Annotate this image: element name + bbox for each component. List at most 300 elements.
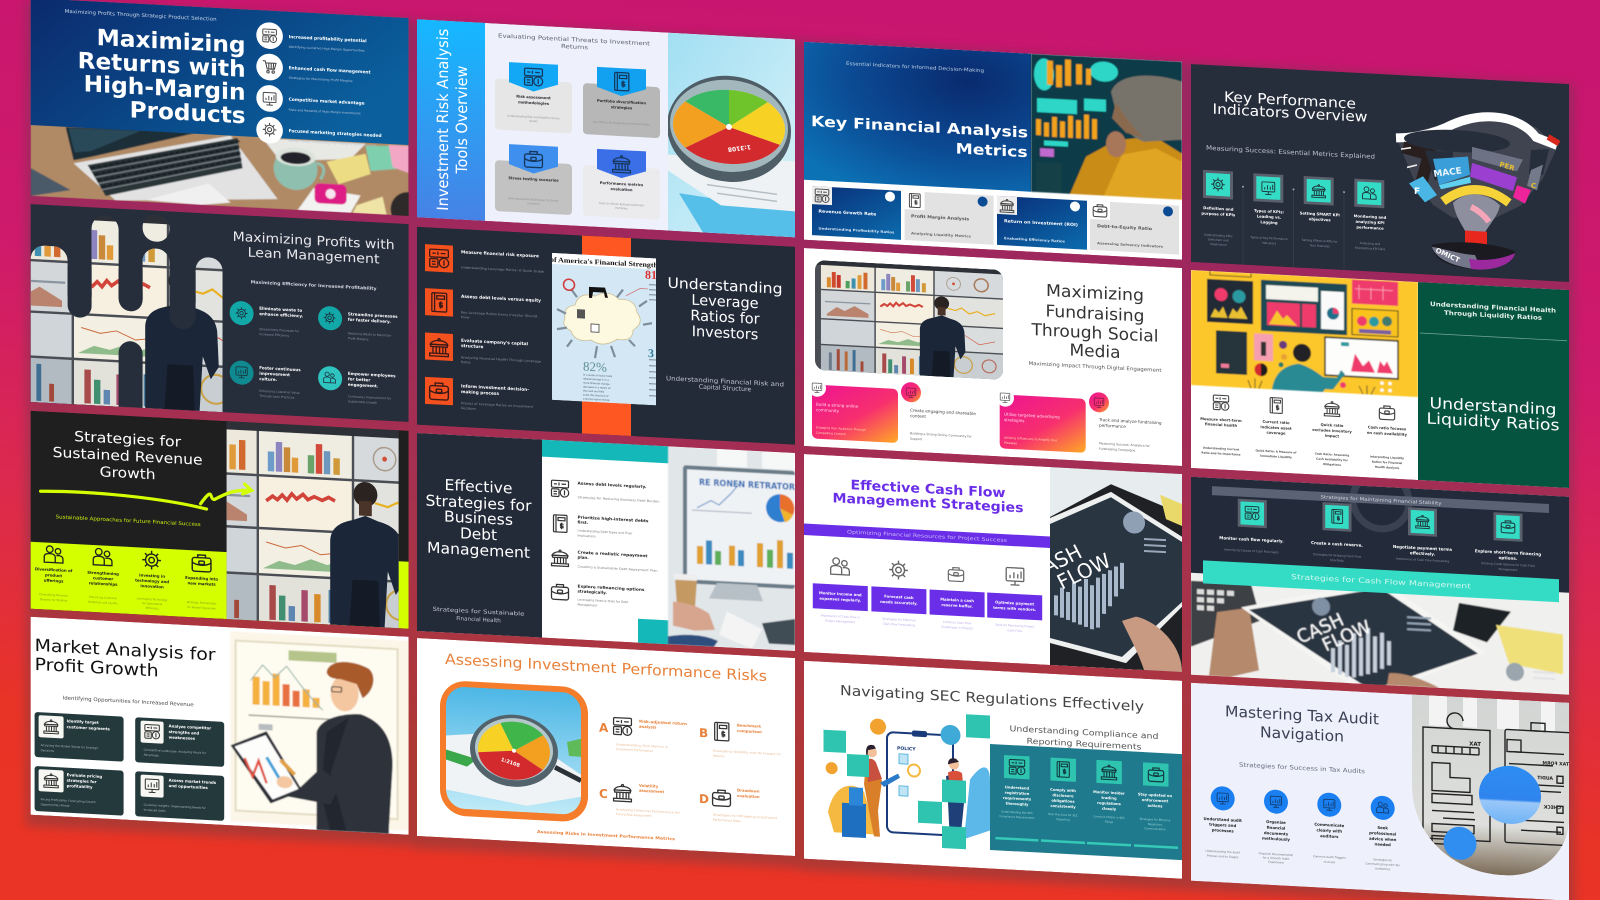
pink circle items: Support — [910, 437, 923, 441]
four liquidity columns: Current ratio — [1263, 420, 1290, 425]
infographic picture: scale the structure of — [583, 393, 609, 398]
title: Market Analysis for — [35, 636, 216, 666]
chart: performance trophy graphic: F — [1414, 187, 1420, 197]
teal requirements panel: actions — [1147, 804, 1163, 809]
subtitle: Identifying Opportunities for Increased Revenue — [63, 695, 194, 708]
four KPI steps: Leading vs. — [1257, 213, 1282, 220]
illustration: businessman reading chart — [231, 631, 409, 835]
four lettered items: Volatility — [639, 783, 659, 789]
four KPI steps: Analyzing and — [1360, 241, 1380, 246]
four list items: Understanding Debt Types and Their — [578, 529, 633, 535]
subtitle: Strategies for Sustainable — [432, 607, 525, 618]
photo: tablet showing cash flow: CASH — [1026, 539, 1086, 585]
four step columns: Maintain a cash — [940, 597, 974, 603]
photo: hands on cash flow tablet: CASH — [1293, 609, 1347, 648]
title: Growth — [100, 464, 156, 483]
four metric cards: Understanding Profitability Ratios — [818, 226, 894, 234]
four liquidity columns: Immediate Liquidity — [1260, 454, 1292, 459]
four dark cards: Assess market trends — [169, 778, 217, 785]
title: Through Social — [1030, 320, 1158, 346]
teal requirements panel: Regulatory — [1148, 822, 1163, 827]
purple band with subtitle: Optimizing Financial Resources for Project Success — [847, 529, 1007, 544]
four liquidity columns: Interpreting Liquidity — [1370, 454, 1404, 460]
title: Fundraising — [1045, 301, 1144, 326]
four blue circle steps: advice when — [1369, 836, 1397, 842]
four teal items: Empower employees — [348, 371, 396, 378]
four blue circle steps: Organize — [1266, 819, 1286, 825]
four KPI steps: Indicators — [1262, 241, 1277, 246]
panel: slide Understanding Leverage Ratios for Investors — [417, 227, 795, 445]
four blue circle steps: Financial Documentation — [1259, 851, 1294, 857]
pink circle items — [901, 382, 1162, 454]
gradient cards: Utilizing Influencers to Amplify Your — [1004, 436, 1058, 442]
four lettered items: assessment — [639, 788, 664, 794]
four dark cards: Customer Insights: Understanding Needs for — [144, 803, 207, 810]
teal requirements panel: Stay updated on — [1138, 792, 1172, 798]
list text: Analyzing Financial Health Through Leverage — [461, 355, 541, 364]
four lime columns: technology and — [135, 578, 169, 584]
four blue circle steps: Strategies for — [1373, 857, 1393, 862]
list text: Decisions — [461, 406, 476, 411]
panel: slide Assessing Investment Performance Risks — [417, 638, 795, 856]
dark title panel — [417, 433, 542, 638]
four strategy columns: Shortfalls — [1330, 558, 1344, 563]
four list items: Explore refinancing options — [578, 584, 645, 592]
four lime columns: Diversification of — [35, 566, 73, 573]
four liquidity columns: Cash Availability for — [1316, 457, 1348, 462]
four step columns: Monitor income and — [819, 590, 862, 597]
framed gauge photo: 1:2108 — [500, 757, 521, 769]
four step columns: Cash Flow — [1007, 628, 1023, 633]
infographic picture — [550, 253, 658, 405]
teal accents — [542, 440, 669, 463]
panel: slide Navigating SEC Regulations Effectively — [804, 661, 1182, 879]
teal requirements panel — [990, 744, 1182, 860]
list of four benefits with round icons: Market Trends Influencing High-Margin Product Success — [289, 139, 377, 147]
panel: slide Effective Cash Flow Management Strategies — [804, 454, 1182, 672]
four lettered items: Analyzing Historical Performance for — [616, 807, 681, 815]
teal requirements panel: Communication — [1144, 826, 1166, 831]
photo: tablet showing cash flow: FLOW — [1053, 548, 1115, 594]
four step columns: terms with vendors. — [993, 605, 1037, 612]
photo: man facing dashboard wall — [226, 421, 399, 628]
four strategy columns: Importance of Cash Flow Forecasting — [1396, 557, 1449, 563]
four strategy columns — [1219, 497, 1541, 573]
panel: slide Effective Strategies for Business Debt Management — [417, 433, 796, 651]
title: Business — [444, 507, 513, 529]
blue title band — [31, 0, 409, 145]
four KPI steps: Setting Effective KPIs for — [1302, 238, 1338, 244]
four liquidity columns: Understanding Current — [1203, 446, 1240, 452]
photo: laptop on a desk — [31, 0, 427, 229]
four dark cards: strategies for — [67, 778, 97, 784]
teal requirements panel: trading — [1101, 796, 1117, 801]
blue title band — [804, 42, 1031, 192]
four teal items: Eliminate waste to — [259, 306, 302, 313]
four dark cards: Increased Sales — [144, 808, 166, 813]
list text: Measure financial risk exposure — [461, 249, 539, 259]
four strategy columns: Identifying Causes of Cash Flow Gaps — [1224, 547, 1279, 554]
illustration: compliance policy phone: POLICY — [897, 746, 916, 753]
teal requirements panel: Monitor insider — [1093, 790, 1125, 796]
title: Returns with — [78, 48, 246, 83]
heading: Understanding Financial Health — [1430, 301, 1556, 315]
four liquidity columns: excludes inventory — [1312, 428, 1352, 434]
four strategy columns: Strategies for Bridging Cash Flow — [1313, 552, 1362, 559]
four lettered items: comparison — [737, 728, 762, 734]
list of four benefits with round icons: Identifying Lucrative High-Margin Opportunities — [289, 45, 365, 53]
panel: slide Strategies for Sustained Revenue Growth — [30, 410, 408, 629]
teal requirements panel: Best Practices for SEC — [1048, 812, 1078, 818]
four metric cards: Return on Investment (ROI) — [1004, 218, 1078, 227]
mask fingers — [68, 266, 196, 408]
footer: Assessing Risks in Investment Performance Metrics — [537, 829, 676, 841]
four lettered items: Returns — [713, 754, 725, 758]
four KPI steps: Understanding KPIs: — [1204, 233, 1233, 238]
title: Navigating SEC Regulations Effectively — [840, 683, 1144, 715]
title: Management Strategies — [833, 491, 1024, 516]
four lettered items: B — [699, 726, 708, 740]
list text: Key Leverage Ratios Every Investor Should — [461, 310, 537, 318]
four list items: Leveraging Finance Tools for Debt — [578, 598, 629, 604]
teal requirements panel: obligations — [1051, 799, 1075, 804]
four teal items: engagement. — [348, 382, 379, 388]
four metric cards: Revenue Growth Rate — [818, 208, 877, 217]
four cards with blue tabs: strategies — [611, 105, 633, 110]
four KPI steps: Monitoring and — [1354, 213, 1387, 220]
teal requirements panel: Understanding Key SEC — [1001, 809, 1033, 815]
photo: tax forms in oval mask: AUDIT — [1536, 775, 1553, 782]
four lime columns: innovation — [140, 583, 164, 589]
four strategy columns: options. — [1499, 555, 1518, 561]
four blue circle steps: Authorities — [1375, 866, 1391, 871]
four KPI steps: Types of KPIs: — [1254, 208, 1284, 215]
teal requirements panel: regulations — [1097, 801, 1122, 806]
four dark cards: Identify target — [67, 718, 99, 725]
teal requirements panel: disclosure — [1052, 793, 1074, 798]
four step columns: Challenges in Projects — [941, 625, 973, 630]
four strategy columns: Management — [1498, 567, 1518, 572]
four cards with blue tabs: Performance metrics — [600, 181, 644, 187]
subtitle: Maximizing Profits Through Strategic Product Selection — [65, 9, 217, 23]
photo: hands on cash flow tablet — [1191, 571, 1569, 709]
four blue circle steps — [1204, 785, 1400, 872]
framed gauge photo — [440, 680, 588, 823]
teal requirements panel: Reporting — [1056, 817, 1070, 822]
infographic picture: 82% — [583, 359, 607, 375]
chart: performance trophy graphic — [1396, 112, 1559, 274]
four lime columns: Strengthening — [87, 570, 119, 576]
panel: slide Investment Risk Analysis Tools Overview — [417, 19, 804, 238]
four lime columns: Streams for Stability — [40, 597, 68, 603]
four cards with blue tabs: Risk Assessment Techniques for Smart — [508, 196, 559, 203]
four lime columns: Leveraging Technology — [137, 596, 168, 602]
panel: slide Key Performance Indicators Overview — [1191, 64, 1569, 282]
four blue circle steps: Communicate — [1314, 822, 1345, 828]
four blue circle steps: meticulously — [1262, 835, 1290, 842]
four teal items: Sustainable Growth — [348, 399, 377, 405]
green title panel — [1418, 282, 1569, 488]
orange vertical strip — [582, 235, 631, 436]
four KPI steps: Types of Key Performance — [1249, 235, 1288, 241]
four teal items: culture. — [259, 376, 278, 382]
four strategy columns: Negotiate payment terms — [1393, 544, 1453, 552]
four cards with blue tabs: Risk assessment — [516, 95, 551, 100]
pink circle items: Track and analyze fundraising — [1098, 417, 1162, 425]
four strategy columns: Explore short-term financing — [1475, 548, 1541, 557]
four dark cards: profitability — [67, 783, 93, 790]
four blue circle steps: Experience — [1268, 860, 1284, 865]
title: Assessing Investment Performance Risks — [445, 652, 767, 685]
four teal items — [230, 301, 398, 406]
title: Investors — [692, 324, 758, 343]
photo: man facing dashboard wall in finger-shaped mask — [30, 216, 223, 412]
four liquidity columns — [1200, 394, 1408, 470]
four step columns — [813, 556, 1042, 634]
photo: hands on cash flow tablet: FLOW — [1319, 617, 1375, 656]
four list items: Prioritize high-interest debts — [578, 515, 649, 523]
top band with subtitle — [1212, 486, 1549, 513]
title: Liquidity Ratios — [1427, 409, 1560, 435]
four lettered items: Investment Performance — [616, 747, 653, 753]
pink circle items: Fundraising Campaigns — [1099, 447, 1136, 453]
four lime columns: for Market Expansion — [187, 605, 216, 611]
four lettered items: Drawdown — [737, 787, 760, 794]
photo: tablet showing cash flow — [1026, 466, 1182, 672]
four cards with blue tabs: Portfolio diversification — [597, 99, 646, 105]
four list items: Strategies for Reducing Business Debt Burden — [578, 495, 660, 504]
subtitle: Maximizing Impact Through Digital Engagement — [1028, 361, 1162, 374]
infographic picture: the cash and files — [583, 389, 605, 394]
four dark cards: Evaluate pricing — [67, 772, 102, 779]
four blue circle steps: to Avoid — [1324, 860, 1335, 864]
list text — [461, 249, 544, 414]
four step columns: Cash Flow Forecasting — [883, 622, 915, 627]
list text: Inform investment decision- — [461, 383, 529, 393]
four dark cards: Advantage — [144, 753, 159, 758]
teal requirements panel: enforcement — [1142, 798, 1168, 803]
teal requirements panel: consistently — [1050, 804, 1076, 809]
four KPI steps: Definition and — [1203, 205, 1234, 212]
list of four benefits with round icons: Enhanced cash flow management — [289, 65, 371, 76]
four lime columns: Enhancing Customer — [89, 595, 118, 600]
infographic picture: of America's Financial Strength — [550, 256, 658, 269]
four cards with blue tabs: Investors — [528, 201, 540, 206]
four blue circle steps: professional — [1369, 830, 1396, 837]
four lime columns: relationships — [89, 580, 118, 587]
rotated title — [436, 30, 468, 210]
photo: tax forms in oval mask: TAX FORM — [1542, 760, 1569, 768]
four lettered items: Future Risk Assessment — [616, 812, 652, 818]
four step columns: expenses regularly. — [819, 596, 862, 603]
title: Metrics — [956, 141, 1028, 161]
title: Management — [427, 539, 530, 562]
four list items: Create a realistic repayment — [578, 550, 648, 558]
list of four benefits with round icons: Increased profitability potential — [289, 34, 367, 44]
divider — [1420, 333, 1567, 341]
four lime columns: customer — [93, 575, 113, 581]
title: Effective Cash Flow — [851, 478, 1006, 501]
subtitle: Measuring Success: Essential Metrics Explained — [1206, 145, 1375, 161]
title: Mastering Tax Audit — [1225, 702, 1379, 728]
four lettered items: Benchmark — [737, 722, 761, 729]
four blue circle steps: Understanding the Audit — [1206, 849, 1241, 855]
photo: tax forms in oval mask — [1412, 694, 1571, 879]
teal requirements panel: closely — [1102, 807, 1117, 811]
teal requirements panel: Common Pitfalls in SEC — [1093, 814, 1125, 820]
four liquidity columns: on cash availability — [1367, 431, 1408, 437]
four dark cards: and opportunities — [169, 783, 209, 790]
four lime columns: Investing in — [139, 572, 165, 579]
top band with subtitle: Strategies for Maintaining Financial Stability — [1320, 494, 1442, 507]
four liquidity columns: Quick ratio — [1321, 423, 1344, 428]
four step columns: Importance of Cash Flow in — [821, 613, 860, 619]
teal requirements panel: Strategies for Effective — [1140, 817, 1171, 822]
four teal items: Streamline processes — [348, 311, 398, 319]
four list items: Creating a Sustainable Debt Repayment Plan — [578, 565, 658, 573]
four blue circle steps: Seek — [1377, 825, 1388, 830]
photo: tax forms in oval mask: CHECK — [1543, 804, 1561, 811]
lime lower band — [31, 542, 409, 629]
four list items: strategically. — [578, 589, 607, 595]
four cards with blue tabs: Assets — [529, 119, 538, 123]
four cards with blue tabs: evaluation — [611, 187, 633, 192]
title: Strategies for — [74, 429, 181, 451]
title: Sustained Revenue — [53, 445, 203, 469]
four metric cards: Debt-to-Equity Ratio — [1097, 223, 1152, 231]
four lime columns: Efficiency — [146, 606, 159, 611]
panel: slide Maximizing Profits with Lean Management — [30, 204, 408, 422]
four step columns: Forecast cash — [884, 594, 914, 600]
four blue circle steps: financial — [1267, 825, 1285, 831]
four dark cards: Competitive Landscape: Analyzing Rivals for — [144, 748, 207, 755]
list text: Assess debt levels versus equity — [461, 294, 541, 304]
four dark cards: Opportunities Ahead — [41, 802, 70, 808]
subtitle: Sustainable Approaches for Future Financial Success — [56, 514, 201, 528]
four KPI steps: Interpreting KPI Data — [1355, 246, 1385, 251]
four teal items: Enhancing Customer Value — [259, 389, 300, 395]
blue side strip — [417, 19, 485, 221]
four liquidity columns: Measure short-term — [1200, 417, 1242, 423]
four liquidity columns: Health Analysis — [1375, 465, 1400, 470]
four lime columns: Strategic Partnerships — [187, 600, 217, 606]
four KPI steps — [1201, 170, 1387, 272]
four liquidity columns: financial health — [1205, 422, 1237, 428]
title: Maximizing — [97, 25, 246, 59]
four lettered items: Strategies for Mitigating Investment — [713, 813, 778, 820]
title: Key Performance — [1224, 90, 1356, 113]
four KPI steps: Lagging — [1260, 219, 1278, 225]
heading: Returns — [561, 44, 588, 51]
four liquidity columns: coverage — [1266, 431, 1286, 436]
four lettered items: Performance Risks — [713, 818, 741, 823]
four teal items: Increased Efficiency — [259, 332, 289, 338]
four cards with blue tabs: methodologies — [518, 100, 550, 106]
four KPI steps: performance — [1356, 224, 1384, 231]
photo: man facing dashboard wall — [815, 260, 1003, 380]
four liquidity columns: impact — [1325, 434, 1339, 439]
rotated title: Tools Overview — [453, 65, 471, 175]
four liquidity columns: Cash Ratio: Assessing — [1315, 452, 1349, 457]
panel: slide Understanding Liquidity Ratios — [1191, 264, 1569, 488]
four step columns: Project Management — [825, 619, 856, 624]
infographic picture: more financial change — [583, 381, 610, 386]
gradient cards: Utilize targeted advertising — [1004, 412, 1060, 420]
four metric cards: Assessing Solvency Indicators — [1097, 241, 1163, 249]
four blue circle steps: auditors — [1320, 833, 1339, 839]
infographic picture: 81 — [645, 267, 657, 282]
pink circle items: Create engaging and shareable — [910, 408, 976, 416]
title: Maximizing Profits with — [233, 230, 395, 253]
infographic picture: 3 — [648, 346, 654, 360]
panel: slide Market Analysis for Profit Growth — [31, 617, 409, 835]
list text: Evaluate company's capital — [461, 338, 529, 347]
photo: man looking at glowing charts — [1031, 54, 1182, 200]
four strategy columns: Monitor cash flow regularly. — [1219, 535, 1284, 544]
four KPI steps: Importance — [1210, 242, 1227, 247]
four blue circle steps: Process and Its Stages — [1207, 854, 1239, 859]
list of four benefits with round icons: Focused marketing strategies needed — [289, 128, 382, 139]
four step columns: Common Cash Flow — [943, 620, 972, 625]
four teal items: Foster continuous — [259, 365, 301, 372]
list text: Ratios — [461, 360, 471, 365]
teal requirements panel: Comply with — [1050, 788, 1076, 793]
four teal items: Profit Margins — [348, 336, 369, 341]
four dark cards: customer segments — [67, 724, 111, 731]
four KPI steps: Your Business — [1310, 243, 1330, 248]
list of four benefits with round icons: Risks and Rewards of High-Margin Investments — [289, 108, 361, 116]
four blue circle steps: Understand audit — [1204, 816, 1242, 823]
subtitle: Essential Indicators for Informed Decision-Making — [846, 61, 984, 74]
four step columns: reserve buffer. — [941, 602, 973, 609]
title: Indicators Overview — [1213, 102, 1367, 126]
dark top panel — [1191, 477, 1569, 593]
chart: performance trophy graphic: PER — [1499, 161, 1516, 173]
list of four benefits with round icons — [256, 22, 382, 149]
four teal items: Through Lean Practices — [258, 394, 295, 400]
four KPI steps: purpose of KPIs — [1201, 211, 1236, 217]
title: High-Margin — [84, 71, 246, 106]
title: Maximizing — [1046, 281, 1144, 305]
four dark cards: Pricing Profitability: Forecasting Growth — [41, 797, 96, 804]
panel: slide Key Financial Analysis Metrics — [804, 42, 1182, 260]
four lime columns: product — [45, 572, 62, 578]
four step columns: needs accurately. — [880, 599, 918, 606]
title: Debt — [460, 524, 497, 544]
photo: risk gauge under magnifying glass: 1:3108 — [727, 143, 751, 153]
four lime columns: new markets — [187, 580, 216, 587]
list text: Know — [461, 315, 470, 320]
subtitle: Maximizing Efficiency for Increased Profitability — [251, 279, 377, 292]
four blue circle steps: Common Audit Triggers — [1313, 854, 1346, 860]
purple band with subtitle — [804, 524, 1050, 548]
four step columns: Strategies for Effective — [882, 617, 916, 622]
four dark cards: Analyzing the Market Trends for Strategic — [41, 743, 99, 750]
four blue circle steps: needed — [1375, 841, 1391, 847]
subtitle: Understanding Compliance and — [1010, 724, 1159, 741]
list of four benefits with round icons: Strategies for Maximizing Profit Margins — [289, 76, 353, 83]
subtitle: Understanding Financial Risk and — [666, 375, 784, 388]
photo: office desk with monitor — [668, 446, 796, 651]
lime brush stroke arrow — [39, 482, 254, 511]
four teal items: enhance efficiency. — [259, 311, 304, 318]
four step columns: Optimize payment — [995, 599, 1034, 607]
four metric cards: Profit Margin Analysis — [911, 213, 970, 221]
four liquidity columns: Ratio and Its Importance — [1201, 451, 1241, 457]
title: Key Financial Analysis — [811, 114, 1028, 142]
four strategy columns: effectively. — [1410, 550, 1436, 557]
panel: slide Maximizing Fundraising Through Social Media — [804, 248, 1182, 466]
